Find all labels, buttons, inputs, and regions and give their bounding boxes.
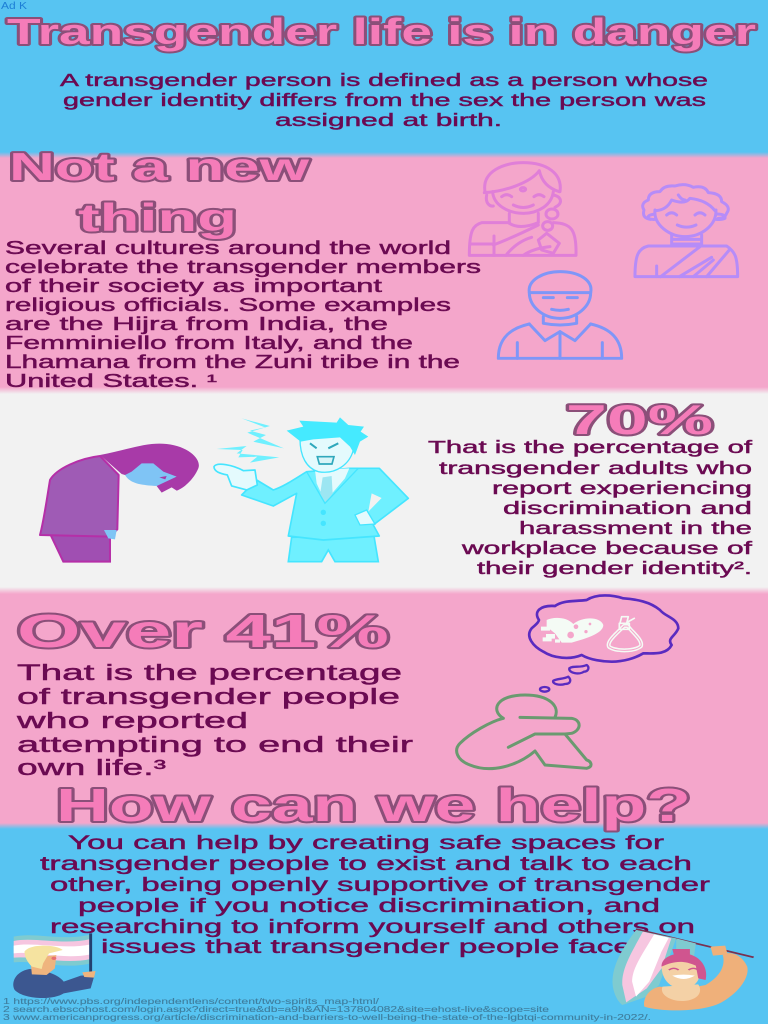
text: cultures paragraph: United States. ¹ <box>5 371 217 391</box>
text: footnotes: 1 https://www.pbs.org/independentlens/content/two-spirits_map-html/ <box>3 997 380 1006</box>
illustration: person holding trans flag <box>13 933 96 998</box>
heading: over 41%: Over 41% <box>17 605 389 657</box>
illustration: woman holding trans flag <box>612 929 754 1010</box>
text: footnotes <box>3 997 651 1022</box>
panel: not a new thing background <box>0 158 768 387</box>
text: attempted suicide statistic: attempting to end their <box>17 732 413 757</box>
text: how to help: transgender people to exist and talk to each <box>40 853 692 875</box>
text: how to help: people if you notice discrimination, and <box>78 895 660 917</box>
text: workplace discrimination: That is the percentage of <box>428 437 752 457</box>
intro text: assigned at birth. <box>275 110 502 130</box>
text: attempted suicide statistic <box>15 660 413 780</box>
text: footnotes: 2 search.ebscohost.com/login.aspx?direct=true&db=a9h&AN=137804082&site=ehost-live&scope=site <box>3 1005 550 1014</box>
panel: 70% background <box>0 394 768 587</box>
text: attempted suicide statistic: of transgender people <box>17 684 400 709</box>
text: cultures paragraph: Several cultures around the world <box>5 238 451 258</box>
intro text: A transgender person is defined as a person whose <box>60 70 708 90</box>
text: how to help: researching to inform yourself and others on <box>50 916 695 938</box>
icon: woman with braid <box>469 163 576 255</box>
intro text <box>60 70 708 130</box>
text: attempted suicide statistic: That is the percentage <box>17 660 402 685</box>
heading: not a new thing: Not a new <box>9 146 310 189</box>
text: workplace discrimination: harassment in the <box>519 518 752 538</box>
text: workplace discrimination: their gender identity². <box>477 558 752 578</box>
text: how to help <box>40 832 711 958</box>
icon: man with collared shirt <box>498 272 622 358</box>
text: cultures paragraph <box>5 238 481 391</box>
text: workplace discrimination: transgender adults who <box>439 458 752 478</box>
text: cultures paragraph: Femminiello from Italy, and the <box>5 333 413 353</box>
text: cultures paragraph: are the Hijra from India, the <box>5 314 388 334</box>
title: Transgender life is in danger <box>7 11 756 52</box>
text: how to help: other, being openly supportive of transgender <box>50 874 711 896</box>
illustration: angry pointing man <box>214 417 408 562</box>
text: attempted suicide statistic: own life.³ <box>17 755 166 780</box>
heading: how can we help: How can we help? <box>56 779 691 831</box>
text: cultures paragraph: Lhamana from the Zuni tribe in the <box>5 352 460 372</box>
text: cultures paragraph: of their society as important <box>5 276 382 296</box>
heading: not a new thing: thing <box>78 197 237 240</box>
text: workplace discrimination <box>428 437 752 578</box>
text: cultures paragraph: celebrate the transgender members <box>5 257 481 277</box>
heading: 70%: 70% <box>566 396 713 443</box>
illustration: bowing person <box>40 444 199 562</box>
panel: how can we help background <box>0 829 768 1024</box>
author credit: Ad K <box>1 1 27 12</box>
panel: header background <box>0 0 768 152</box>
illustration: thought bubble with broken heart and noose <box>457 595 678 769</box>
text: cultures paragraph: religious officials. Some examples <box>5 295 451 315</box>
text: workplace discrimination: report experiencing <box>492 478 752 498</box>
heading: not a new thing <box>9 146 310 240</box>
text: workplace discrimination: discrimination and <box>503 498 752 518</box>
text: how to help: You can help by creating safe spaces for <box>68 832 665 854</box>
text: workplace discrimination: workplace because of <box>460 538 752 558</box>
intro text: gender identity differs from the sex the person was <box>63 90 706 110</box>
icon: person with curly hair <box>635 185 738 277</box>
text: footnotes: 3 www.americanprogress.org/article/discrimination-and-barriers-to-well-being-the-state-of-the-lgbtqi-community-in-2022/. <box>3 1013 651 1022</box>
panel: over 41% background <box>0 594 768 823</box>
text: attempted suicide statistic: who reported <box>15 708 248 733</box>
text: how to help: issues that transgender people face <box>101 936 632 958</box>
